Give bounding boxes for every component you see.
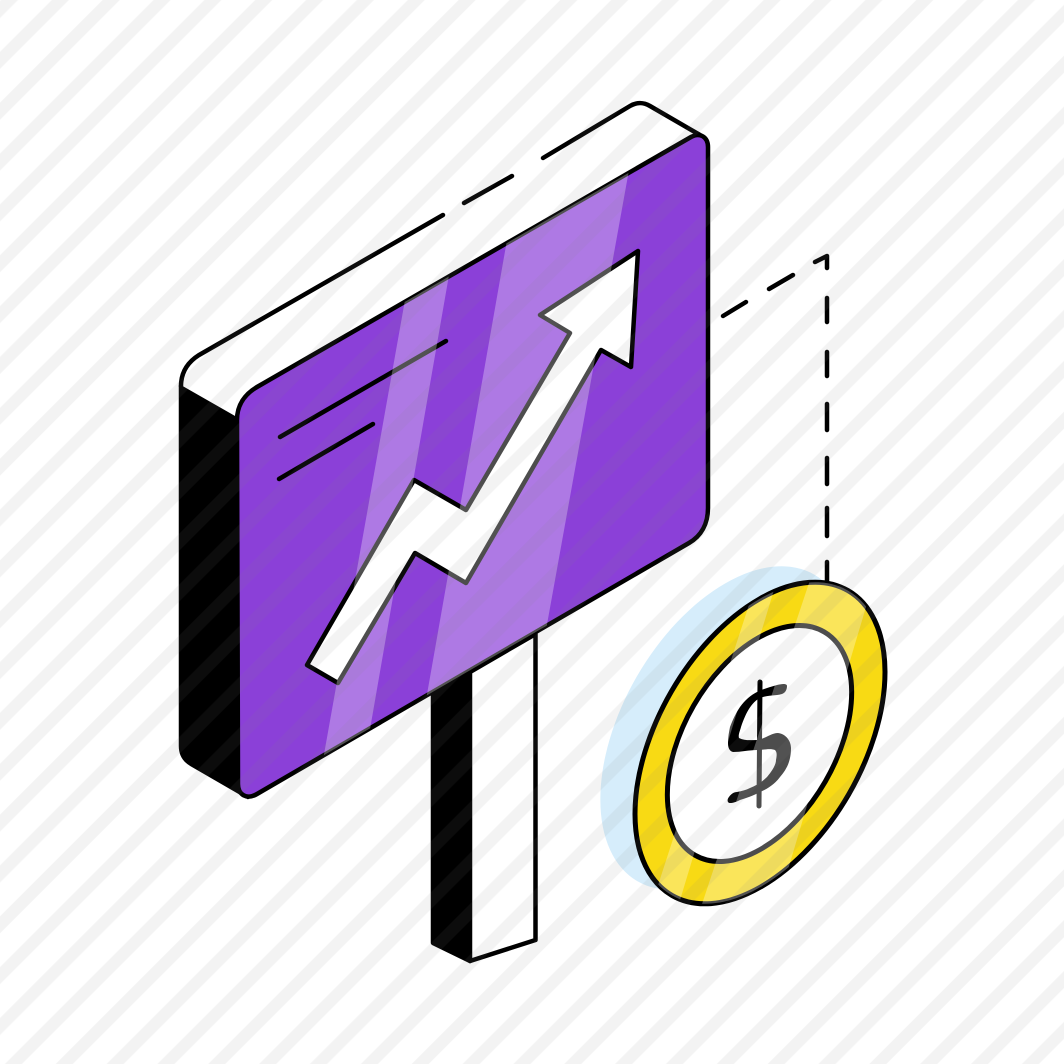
coin reflections	[650, 580, 874, 910]
billboard front face	[237, 135, 708, 797]
coin centre	[629, 594, 890, 893]
billboard top edge	[180, 103, 700, 418]
text lines on billboard	[279, 341, 446, 479]
coin ring	[583, 539, 937, 947]
billboard post	[433, 634, 536, 961]
dollar coin	[632, 580, 888, 906]
dollar sign	[728, 682, 791, 806]
dashed connector line	[723, 256, 827, 584]
billboard glass reflections	[323, 170, 629, 760]
rising arrow	[307, 251, 638, 683]
coin shadow	[548, 523, 904, 933]
billboard side panel	[180, 386, 248, 798]
